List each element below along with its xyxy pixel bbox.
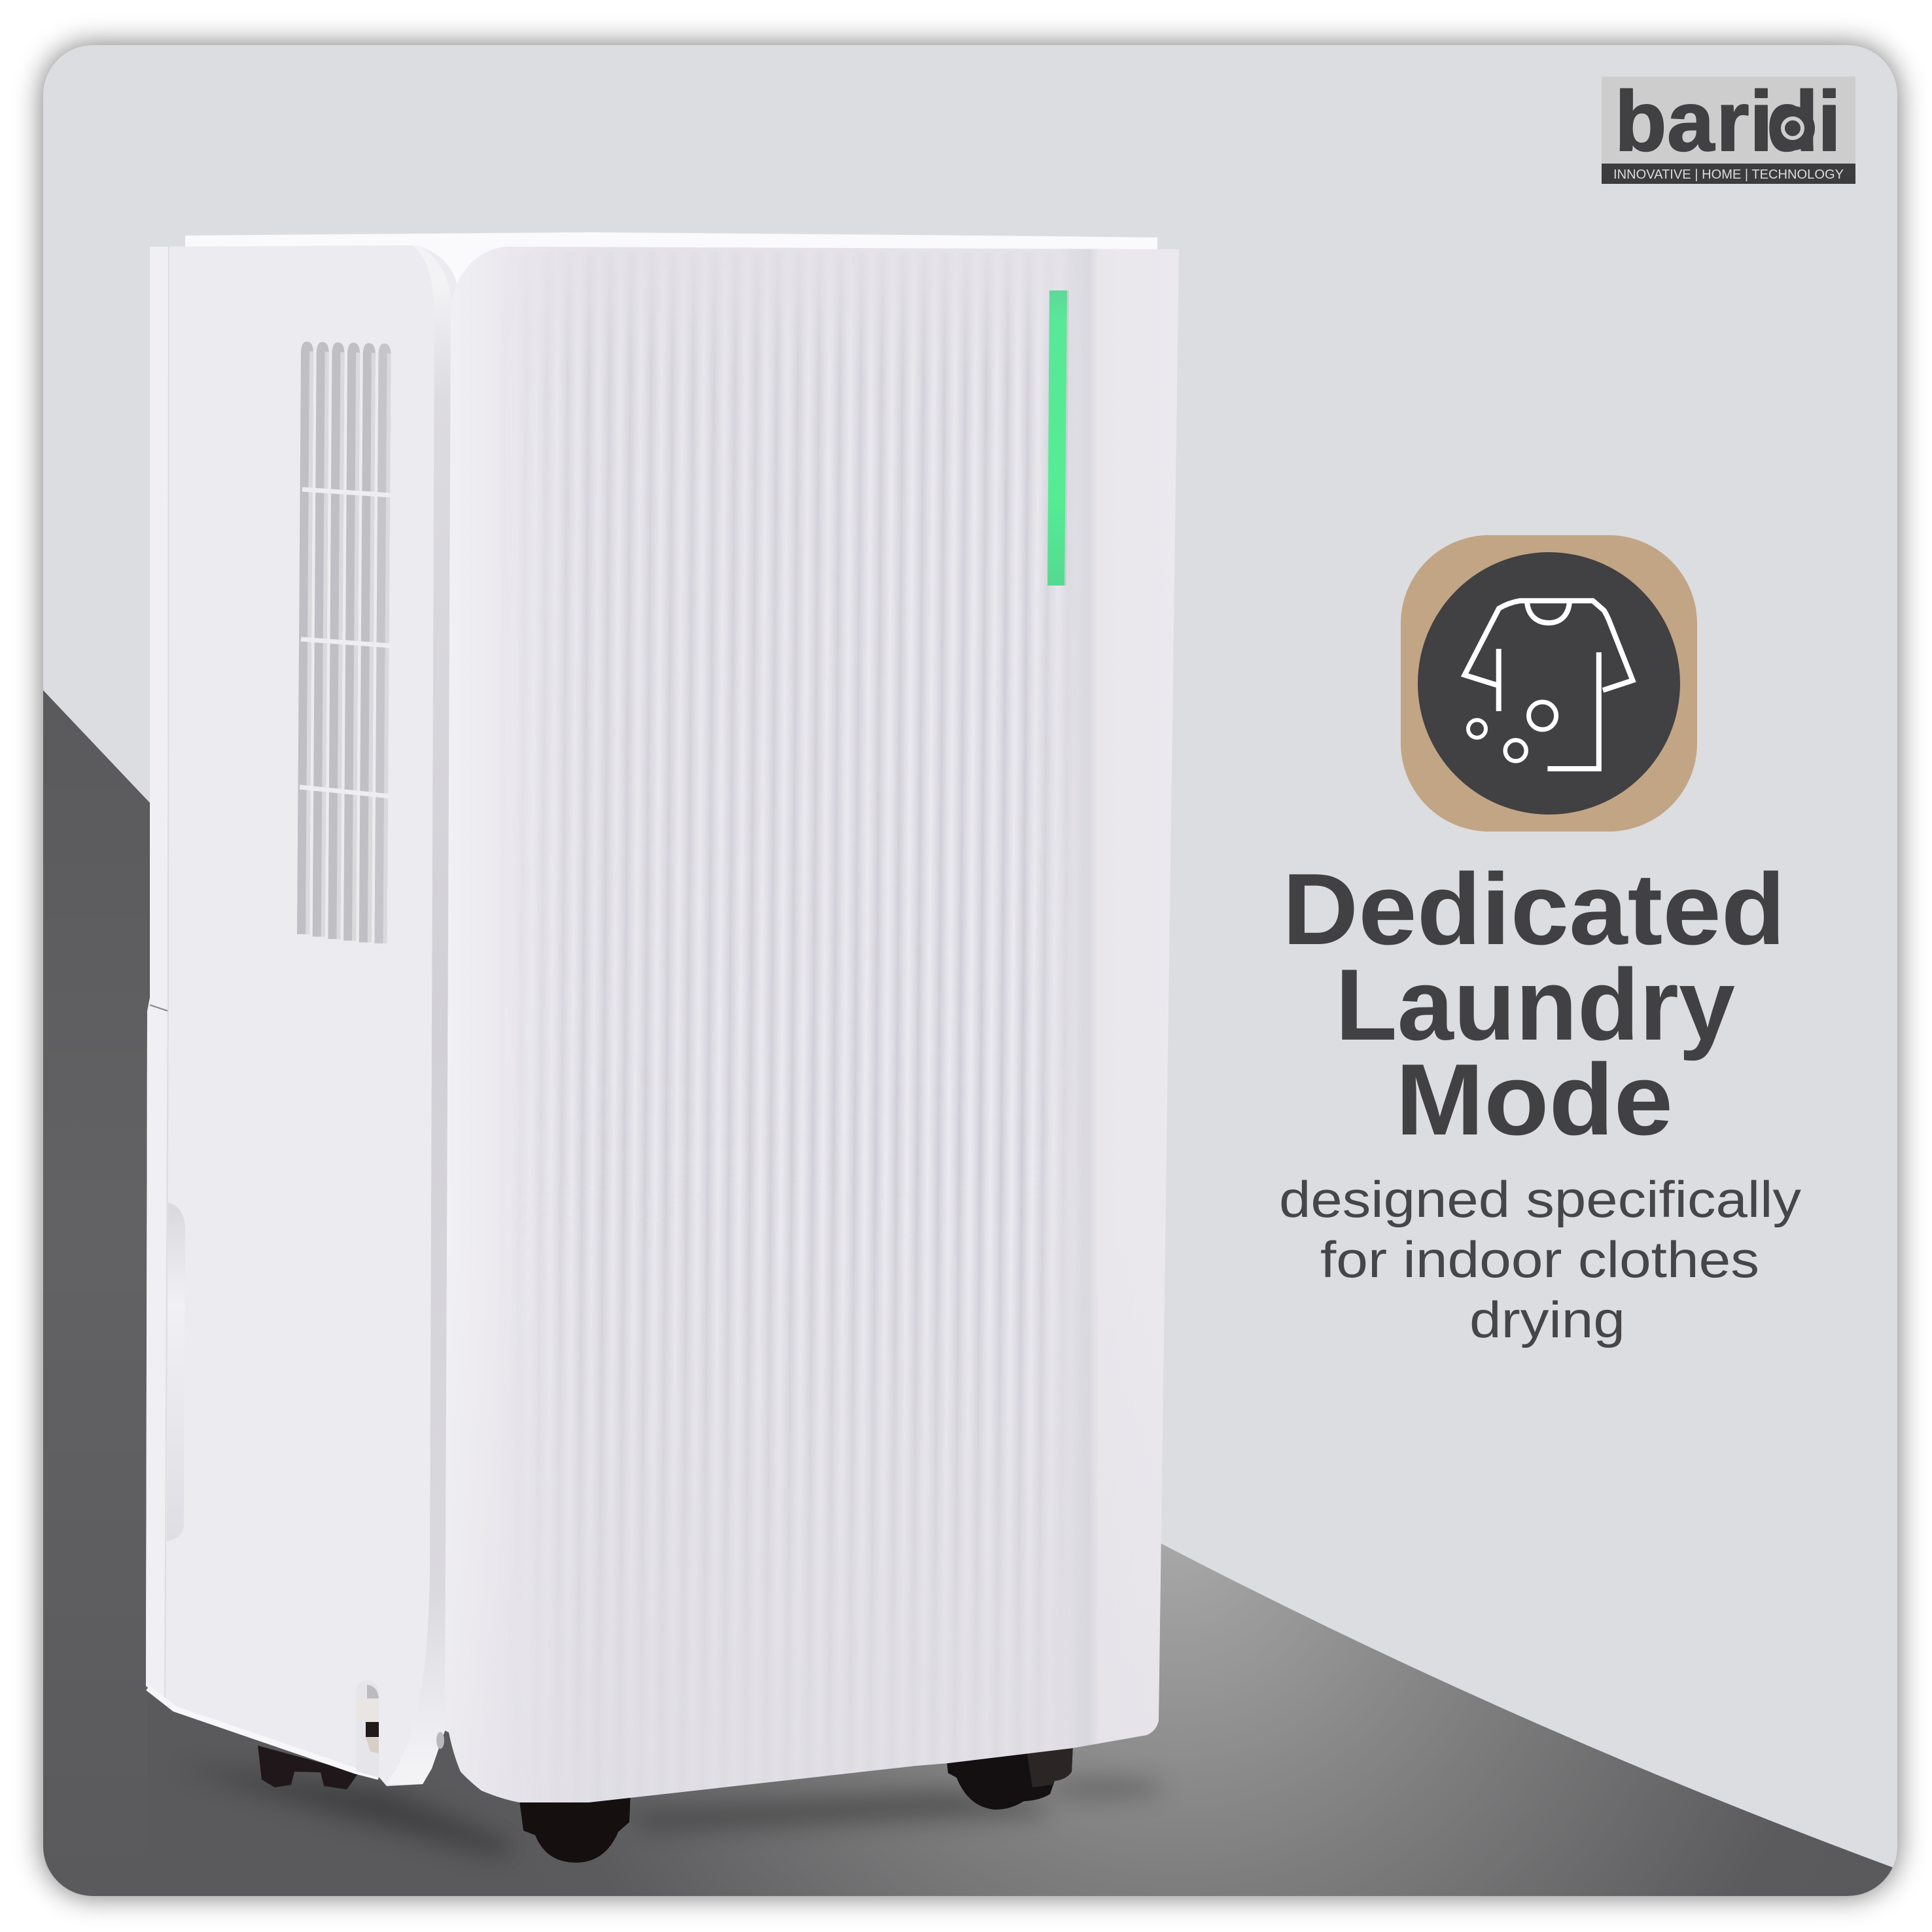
lower edge highlight <box>148 1688 379 1777</box>
side air vents <box>297 342 391 943</box>
top cap <box>185 232 1157 327</box>
icon dark circle <box>1418 552 1680 815</box>
icon tan squircle <box>1401 535 1697 832</box>
handle recess <box>167 1203 185 1541</box>
heading <box>1282 852 1785 1156</box>
product: dehumidifier <box>146 232 1184 1863</box>
logo tagline bar <box>1602 164 1855 184</box>
heading: Dedicated <box>1282 852 1785 966</box>
side groove strip <box>386 245 452 1784</box>
description text <box>1279 1170 1801 1348</box>
left side panel <box>146 245 458 1786</box>
description text: for indoor clothes <box>1320 1231 1759 1288</box>
logo wordmark: baridi <box>1615 73 1841 169</box>
shirt outline <box>1465 601 1633 769</box>
back wheels <box>258 1746 359 1789</box>
heading: Mode <box>1396 1043 1673 1156</box>
front right wheel <box>947 1744 1073 1810</box>
description text: drying <box>1469 1291 1625 1348</box>
logo d ring <box>1770 106 1815 150</box>
floor shadows <box>177 1766 1165 1857</box>
hinge pin <box>436 1732 444 1749</box>
front panel <box>445 247 1179 1802</box>
icon: t-shirt with bubbles <box>1401 535 1697 832</box>
drain slot <box>356 1680 379 1778</box>
left panel edge strip <box>146 247 169 1701</box>
logo: baridi <box>1602 73 1855 184</box>
bubbles <box>1468 702 1556 761</box>
front left wheel <box>519 1789 631 1863</box>
dark floor shape <box>43 690 1897 1897</box>
logo tagline: INNOVATIVE | HOME | TECHNOLOGY <box>1613 167 1844 182</box>
green status light <box>1047 290 1069 586</box>
heading: Laundry <box>1335 948 1735 1061</box>
description text: designed specifically <box>1279 1170 1801 1228</box>
logo background <box>1602 77 1855 164</box>
front panel ribs <box>538 289 1071 1802</box>
